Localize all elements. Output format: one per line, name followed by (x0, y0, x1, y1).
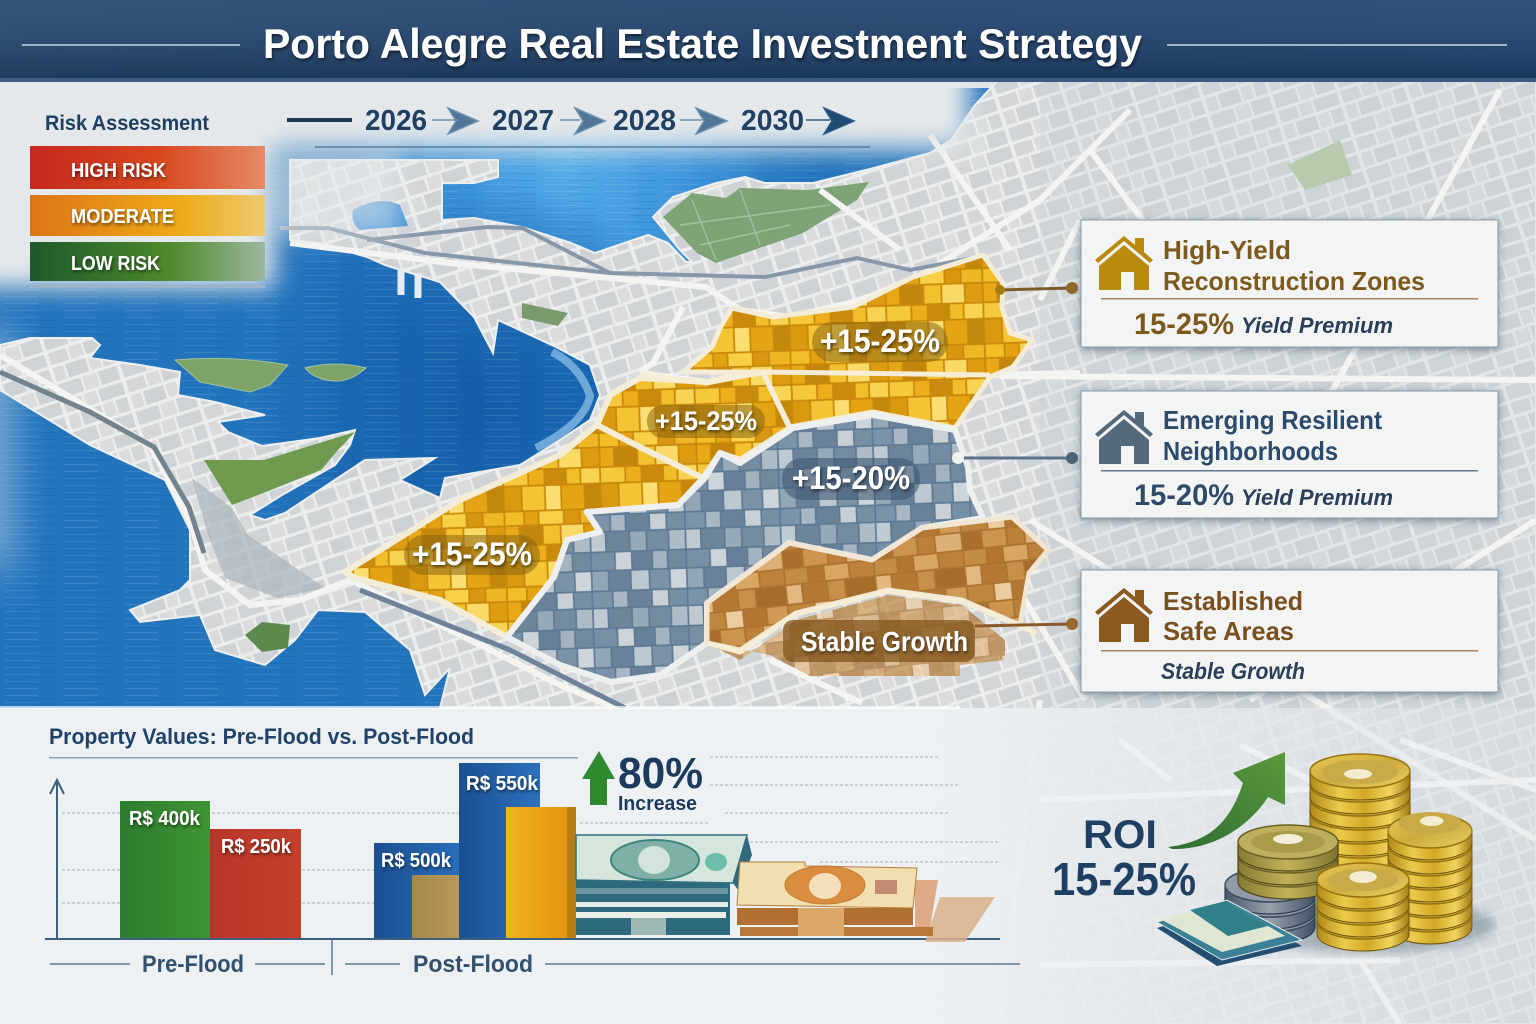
axis labels: Post-Flood (413, 951, 533, 978)
bar: post-flood blue 500k: R$ 500k (381, 850, 452, 872)
banknotes: green stack (576, 835, 752, 935)
zone: orange safe (707, 517, 1048, 650)
bar: post-flood blue 550k (459, 763, 540, 938)
legend: moderate: MODERATE (71, 206, 174, 228)
timeline arrow 4 (806, 108, 854, 134)
zone label: upper yellow: +15-25% (820, 323, 940, 359)
highway south (360, 590, 625, 708)
title: Porto Alegre Real Estate Investment Strategy (263, 20, 1143, 67)
north pier fade (270, 150, 400, 235)
icon: brown house (1095, 588, 1153, 642)
highway north (280, 227, 978, 277)
panel title: Neighborhoods (1163, 436, 1338, 466)
coin stack: steel (1225, 868, 1315, 944)
connector: high-yield (995, 282, 1078, 295)
legend: moderate (30, 195, 265, 236)
coin stack: right (1388, 812, 1472, 944)
panel title: Safe Areas (1163, 616, 1294, 646)
park: east (1288, 140, 1352, 190)
park: west peninsula (204, 432, 355, 505)
island: large north (175, 358, 288, 392)
yield text: Yield Premium (1241, 485, 1393, 510)
harbour basin (352, 201, 408, 230)
callout: 80% increase: Increase (618, 793, 697, 815)
panel title: High-Yield (1163, 235, 1291, 265)
panel title: Established (1163, 586, 1303, 616)
panel title: Emerging Resilient (1163, 405, 1382, 435)
zone: orange lower (707, 595, 1005, 676)
roi section (1040, 740, 1536, 1024)
roi text: 15-25% (1052, 853, 1196, 905)
stable growth text: Stable Growth (1161, 658, 1305, 684)
panel: high-yield (1081, 220, 1498, 347)
connector: resilient (952, 452, 1078, 464)
icon: gold house (1095, 236, 1153, 290)
axis labels: Pre-Flood (142, 951, 244, 978)
east map tint (1040, 78, 1536, 1024)
bay seawall (536, 352, 590, 448)
timeline: 2026 (365, 105, 427, 137)
bar chart (120, 763, 576, 938)
bar: pre-flood red (210, 829, 301, 938)
highway west (0, 372, 204, 553)
bar: pre-flood red: R$ 250k (221, 836, 292, 858)
timeline arrow 1 (432, 108, 478, 134)
coin stack: back tall (1310, 754, 1410, 884)
yield text: 15-20% (1134, 479, 1234, 512)
zone label: middle yellow: +15-25% (655, 406, 757, 436)
legend heading: Risk Assessment (45, 112, 209, 135)
coin stack: front (1317, 863, 1409, 951)
west grey district (192, 478, 325, 598)
yield text (1134, 308, 1393, 341)
timeline arrow 3 (680, 108, 727, 134)
timeline (287, 105, 870, 148)
zone: lower-left yellow (345, 425, 703, 637)
banknotes: small stack (1157, 900, 1302, 966)
zone label: stable growth: Stable Growth (801, 626, 968, 657)
bar: post-flood blue 550k: R$ 550k (466, 773, 539, 795)
zone label: grey: +15-20% (792, 460, 910, 496)
legend: high risk: HIGH RISK (71, 160, 167, 182)
legend: risk assessment (30, 112, 265, 288)
roi text (1052, 813, 1196, 905)
roi text: ROI (1083, 813, 1157, 857)
yield text: 15-25% (1134, 308, 1234, 341)
connector: safe (975, 618, 1078, 630)
panel: emerging (1081, 391, 1498, 518)
zone label: stable growth (783, 620, 975, 662)
icon: slate house (1095, 410, 1153, 464)
top band fade (0, 50, 970, 150)
water (0, 88, 1040, 713)
bar: pre-flood green: R$ 400k (129, 808, 201, 830)
yield text (1134, 479, 1393, 512)
legend: low risk: LOW RISK (71, 253, 160, 275)
header band (0, 0, 1536, 82)
island: small north east (305, 364, 366, 381)
panel: established (1081, 570, 1498, 692)
timeline: 2027 (492, 105, 554, 137)
roi map roads (1040, 740, 1536, 1024)
legend: high risk (30, 146, 265, 189)
timeline arrow 2 (560, 108, 605, 134)
bar: post-flood blue 500k (374, 843, 469, 938)
panel: property values (0, 706, 1536, 1024)
zone: middle yellow (597, 372, 790, 478)
timeline: 2030 (741, 105, 804, 137)
axis labels (50, 940, 1020, 978)
zone label: lower yellow: +15-25% (412, 536, 532, 572)
park: city (522, 303, 568, 326)
zone inner roads (640, 372, 1036, 652)
axis (45, 780, 1000, 939)
icon: up arrow (582, 751, 615, 805)
chart heading: Property Values: Pre-Flood vs. Post-Flood (49, 724, 474, 749)
grid lines (62, 757, 1000, 903)
yield text: Yield Premium (1241, 313, 1393, 338)
hill park paths (680, 190, 830, 260)
timeline: 2028 (613, 105, 676, 137)
bar: post-flood yellow (506, 807, 576, 938)
callout: 80% increase: 80% (618, 749, 703, 798)
panel title: Reconstruction Zones (1163, 266, 1425, 296)
harbour piers (401, 268, 418, 298)
banknotes: orange stack (737, 862, 995, 942)
legend fade (0, 60, 275, 288)
coin shadow (1245, 897, 1495, 953)
bar: pre-flood green (120, 801, 210, 938)
legend: low risk (30, 242, 265, 288)
park: hook (245, 622, 290, 652)
coin stack: olive (1238, 825, 1338, 899)
icon: growth arrow (1168, 752, 1285, 849)
zone: upper yellow (683, 255, 1032, 428)
zone: grey resilient (507, 415, 983, 682)
park: hill (663, 182, 869, 263)
